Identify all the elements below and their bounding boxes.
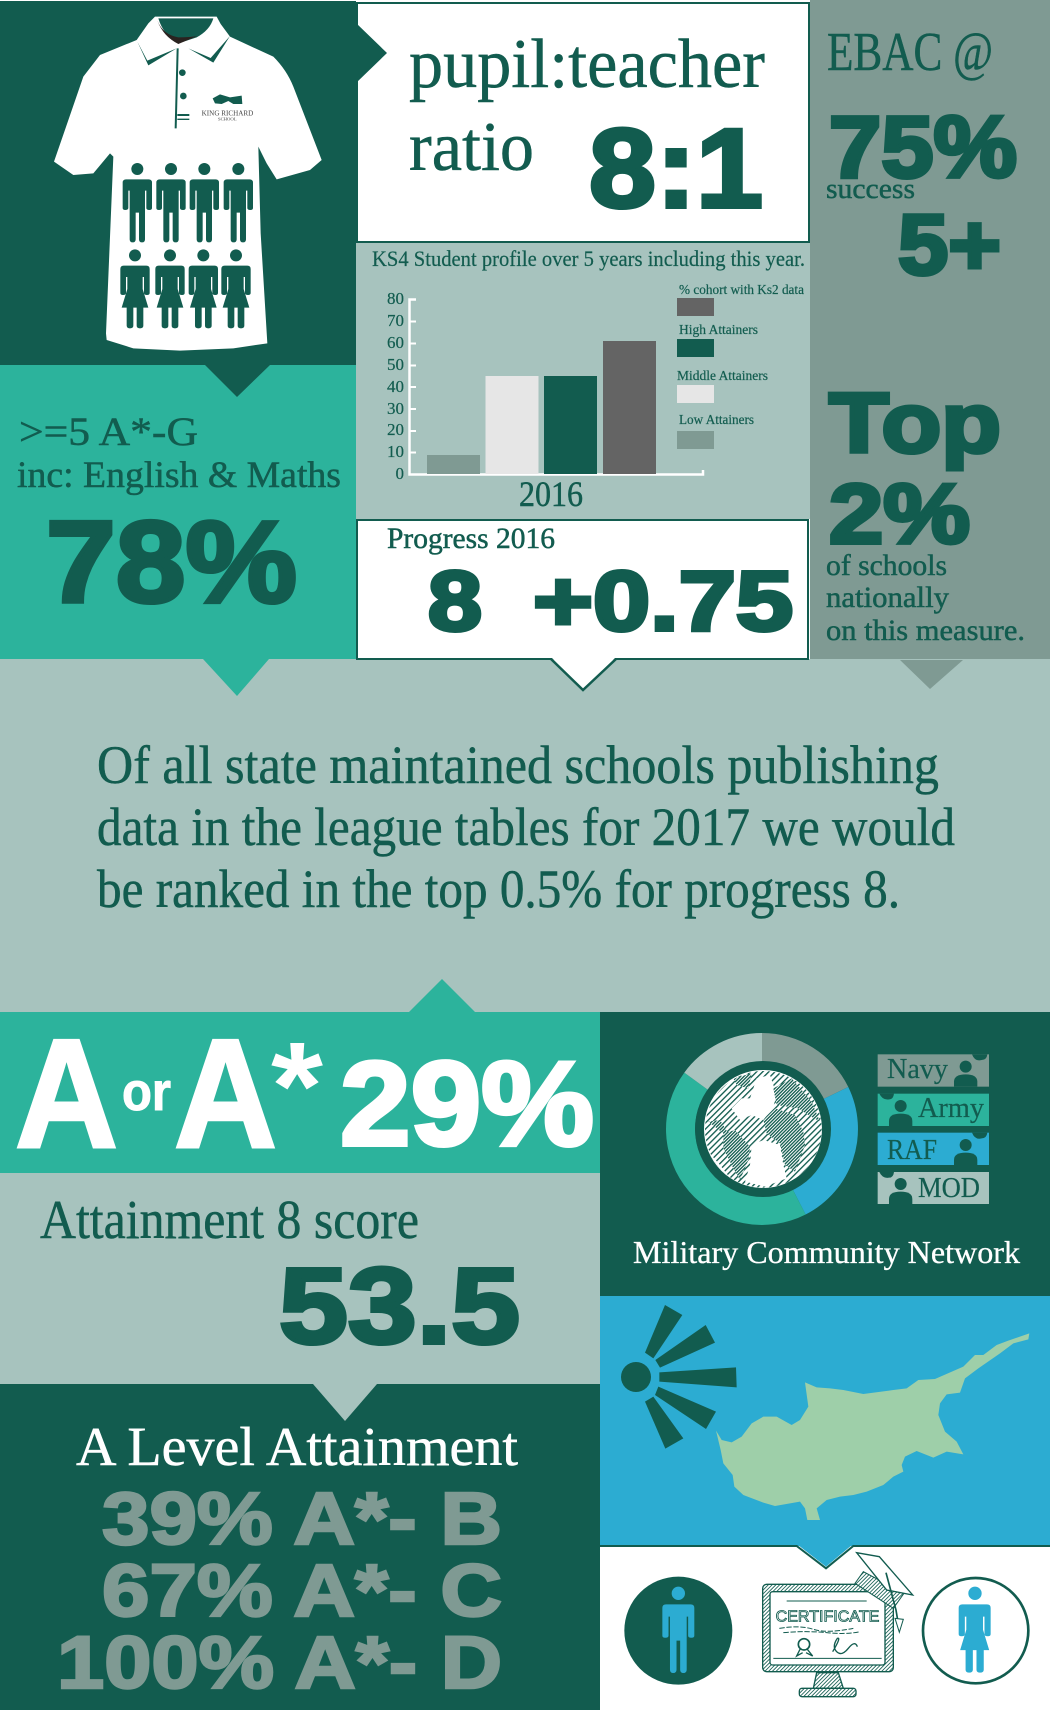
panel: military community network: RAF: [887, 1134, 937, 1166]
chart legend: % cohort with Ks2 data: [679, 282, 804, 297]
panel: shirt background: [0, 1, 356, 366]
panel: pupil teacher ratio: [356, 3, 809, 242]
icon: polo shirt: [54, 17, 322, 351]
icon: sun: [621, 1305, 737, 1449]
panel: A or A* 29 percent: A: [15, 1007, 118, 1180]
panel: EBAC and top 2 percent: [810, 0, 1050, 660]
panel: progress 8: [357, 520, 808, 690]
bar chart: 20: [387, 420, 404, 439]
panel: ranking statement: be ranked in the top 0.5% for progress 8.: [97, 859, 900, 919]
bar chart: 40: [387, 377, 404, 396]
panel: EBAC and top 2 percent: nationally: [826, 581, 949, 614]
panel: attainment 8 score: [0, 1173, 600, 1384]
panel: 5 A*-G including English and Maths: inc: English & Maths: [17, 455, 341, 496]
chart legend: Middle Attainers: [677, 368, 768, 383]
panel: military community network: Military Community Network: [633, 1234, 1020, 1270]
panel: Cyprus map: [600, 1296, 1050, 1546]
icon: certificate on screen with graduation cap: CERTIFICATE: [776, 1609, 879, 1626]
panel: pupil teacher ratio: 8:1: [589, 106, 763, 231]
panel: KS4 student profile chart: KS4 Student profile over 5 years including this year.: [372, 246, 805, 271]
icon: certificate on screen with graduation cap: [763, 1553, 913, 1697]
panel: A level attainment: 67% A*- C: [102, 1549, 502, 1632]
panel: EBAC and top 2 percent: 2%: [829, 467, 970, 561]
panel: EBAC and top 2 percent: 5+: [898, 198, 1001, 293]
panel: military community network: Navy: [887, 1053, 948, 1085]
panel: A or A* 29 percent: A: [174, 1007, 277, 1180]
icon: female pupil: [923, 1578, 1028, 1683]
panel: EBAC and top 2 percent: success: [826, 173, 915, 205]
bar chart: 10: [387, 442, 404, 461]
panel: progress 8: 8: [428, 554, 482, 648]
panel: EBAC and top 2 percent: EBAC @: [827, 21, 993, 82]
panel: ranking statement: data in the league tables for 2017 we would: [97, 797, 955, 857]
panel: A level attainment: A Level Attainment: [76, 1416, 518, 1477]
icon: polo shirt: KING RICHARD: [202, 109, 253, 118]
bar chart: 30: [387, 399, 404, 418]
bar chart: 0: [396, 464, 404, 483]
panel: ranking statement: [0, 659, 1050, 1012]
bar chart: [387, 289, 703, 514]
panel: EBAC and top 2 percent: Top: [829, 376, 1001, 470]
donut chart with globe: [666, 1033, 858, 1225]
panel: pupil teacher ratio: ratio: [409, 109, 534, 186]
bar chart: 2016: [519, 474, 583, 514]
chart legend: [677, 282, 804, 449]
panel: A level attainment: [0, 1384, 600, 1710]
panel: A or A* 29 percent: 29%: [340, 1037, 594, 1171]
panel: military community network: MOD: [918, 1172, 980, 1204]
legend: service branches: [878, 1054, 989, 1204]
panel: A or A* 29 percent: *: [271, 1017, 323, 1156]
panel: EBAC and top 2 percent: 75%: [829, 99, 1017, 196]
panel: 5 A*-G including English and Maths: 78%: [46, 497, 297, 627]
chart legend: High Attainers: [679, 322, 758, 337]
panel: attainment 8 score: 53.5: [279, 1245, 520, 1366]
panel: pupil teacher ratio: pupil:teacher: [409, 26, 765, 103]
bar chart: 70: [387, 311, 404, 330]
panel: progress 8: +0.75: [533, 554, 793, 648]
panel: military community network: [600, 1012, 1050, 1297]
bar chart: 80: [387, 289, 404, 308]
panel: military community network: Army: [918, 1092, 984, 1124]
panel: EBAC and top 2 percent: on this measure.: [826, 614, 1025, 647]
bar chart: 50: [387, 355, 404, 374]
panel: attainment 8 score: Attainment 8 score: [40, 1189, 419, 1250]
panel: progress 8: Progress 2016: [387, 522, 555, 555]
panel: gender balance and certificate: [600, 1545, 1050, 1710]
panel: EBAC and top 2 percent: of schools: [826, 549, 947, 582]
icon: male pupil: [624, 1577, 732, 1685]
icon: eight pupils on shirt: [120, 163, 253, 328]
panel: KS4 student profile chart: [356, 243, 810, 519]
icon: polo shirt: SCHOOL: [218, 117, 237, 122]
panel: ranking statement: Of all state maintained schools publishing: [97, 735, 939, 795]
panel: 5 A*-G including English and Maths: >=5 A*-G: [19, 409, 198, 454]
panel: A or A* 29 percent: or: [122, 1062, 171, 1122]
panel: 5 A*-G including English and Maths: [0, 365, 356, 659]
bar chart: 60: [387, 333, 404, 352]
chart legend: Low Attainers: [679, 412, 754, 427]
map: Cyprus: [716, 1333, 1029, 1520]
panel: A level attainment: 39% A*- B: [102, 1477, 502, 1560]
panel: A level attainment: 100% A*- D: [57, 1621, 502, 1704]
panel: A or A* 29 percent: [0, 1007, 600, 1180]
